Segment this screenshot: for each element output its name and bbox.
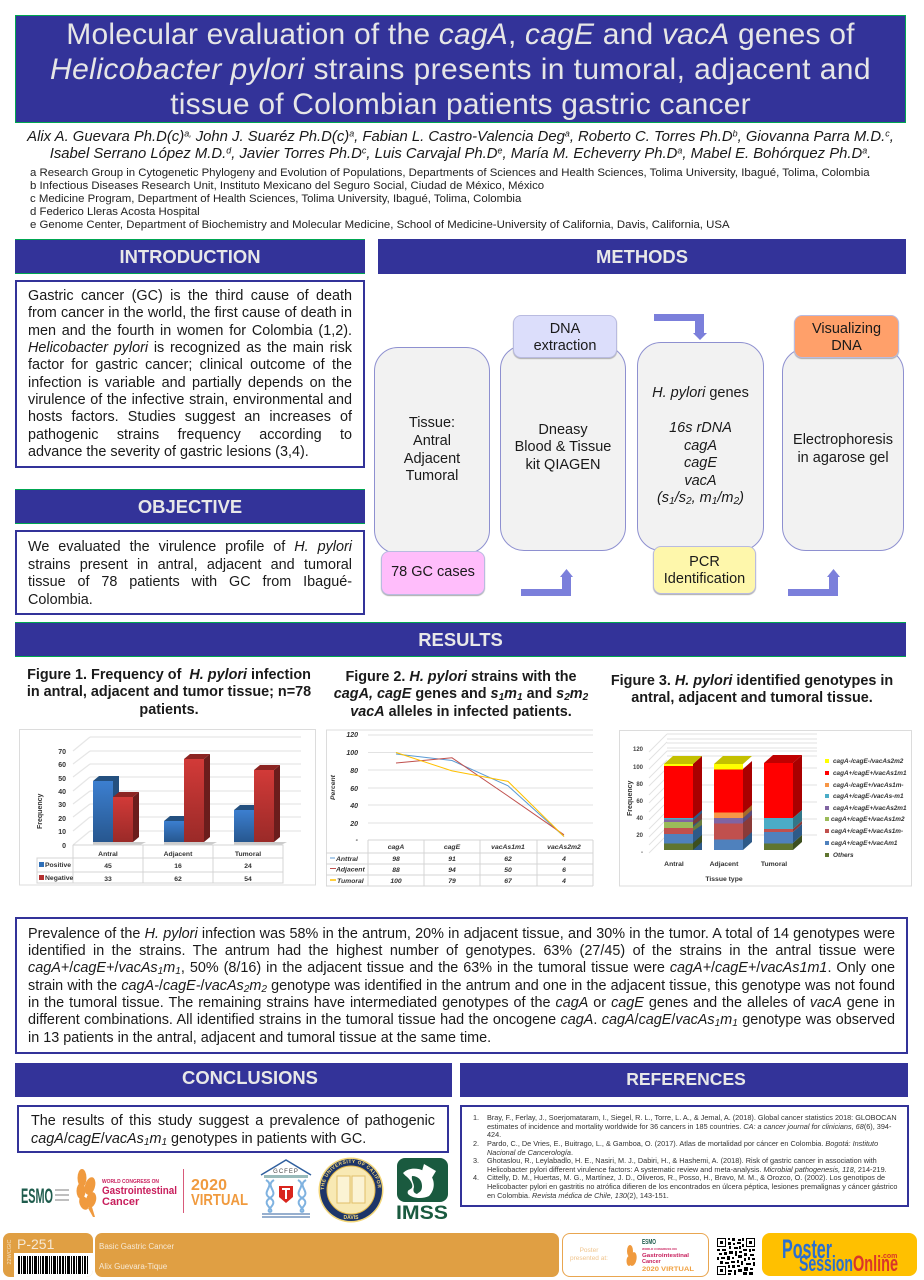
reference 4: en Colombia. Revista médica de Chile, 130(2), 143-151. <box>487 1191 669 1200</box>
affiliations <box>30 167 870 231</box>
logo: University of California Davis seal: DAVIS <box>344 1215 359 1221</box>
title <box>15 15 906 123</box>
method box: tissue: Antral <box>413 433 451 449</box>
legend: cagA+/cagE+/vacAs1m1 <box>833 770 907 777</box>
panel: objective text <box>15 530 365 615</box>
legend: Others <box>833 852 854 859</box>
chart: figure 2 line chart: vacAs1m1 <box>491 844 525 851</box>
chart: figure 1 3D bar chart: 70 <box>58 749 66 756</box>
panel: results text: strain with the cagA-/cagE-/vacAs2m2 genotype was identified in the antrum and one in the adjacent tissue, this genotype was not found <box>28 978 895 995</box>
chart: figure 3 stacked 3D bar chart <box>619 730 912 886</box>
logo: ESMO World Congress on Gastrointestinal Cancer 2020 Virtual: WORLD CONGRESS ON <box>102 1179 159 1185</box>
chart: figure 2 line chart: cagE <box>444 844 461 851</box>
chart: figure 2 line chart: 91 <box>448 856 456 863</box>
chart: figure 1 3D bar chart: 10 <box>58 829 66 836</box>
reference 2: 2. <box>473 1139 479 1148</box>
chart: figure 3 stacked 3D bar chart: 40 <box>636 816 644 822</box>
reference 4 <box>473 1173 898 1200</box>
panel: introduction text: pathogenic strains frequency according to <box>28 427 352 443</box>
method box: kit <box>500 345 626 551</box>
chart: figure 1 3D bar chart: Adjacent <box>164 851 193 858</box>
chart: figure 2 line chart: 67 <box>504 878 513 885</box>
method box: genes: cagE <box>684 455 717 471</box>
footer: poster ID tab <box>3 1233 93 1277</box>
tag: 78 GC cases <box>381 551 485 595</box>
reference 2: Nacional de Cancerología. <box>487 1148 573 1157</box>
chart: figure 1 3D bar chart: 50 <box>58 776 66 783</box>
heading: conclusions <box>15 1063 452 1097</box>
chart: figure 1 3D bar chart: 40 <box>58 789 66 796</box>
legend: cagA+/cagE+/vacAs1m- <box>831 828 903 835</box>
figure 3 title: Figure 3. H. pylori identified genotypes in <box>611 673 893 689</box>
panel: results text: in the tumoral tissue. The remaining strains have intermediated genotypes of the cagA or cagE genes and the alleles of vacA gene in <box>28 995 895 1011</box>
method box: kit: Dneasy <box>538 422 588 438</box>
panel: introduction text: hosts factors. Studies suggest an increases of <box>28 409 352 425</box>
affiliations: e Genome Center, Department of Biochemistry and Molecular Medicine, School of Medicine-University of California, Davis, California, USA <box>30 219 730 231</box>
chart: figure 3 stacked 3D bar chart: Tissue type <box>705 876 743 883</box>
reference 2 <box>473 1139 878 1157</box>
footer: poster presented at box <box>562 1233 709 1277</box>
method box: kit: kit QIAGEN <box>526 457 600 473</box>
reference 3: Helicobacter pylori different virulence factors: A systematic review and meta-analysis. Microbial pathogenesis, 118, 214-219. <box>487 1165 887 1174</box>
chart: figure 2 line chart: 4 <box>561 878 566 885</box>
chart: figure 2 line chart: 60 <box>350 786 358 793</box>
panel: introduction text: Helicobacter pylori is recognized as the main risk <box>28 340 352 356</box>
reference 3: Ghotaslou, R., Leylabadlo, H. E., Nasiri, M. J., Dabiri, H., & Hashemi, A. (2018). Risk of gastric cancer in association with <box>487 1156 877 1165</box>
adjacent line <box>396 758 564 835</box>
panel: objective text: We evaluated the virulence profile of H. pylori <box>28 539 352 555</box>
chart: figure 2 line chart <box>326 730 594 886</box>
title: Molecular evaluation of the cagA, cagE and vacA genes of <box>66 18 855 51</box>
panel: results text: identified in the strains. The antrum had the highest number of genotypes. 63% (27/45) of the strains in the antral tissue were <box>28 943 895 959</box>
legend: cagA+/cagE+/vacAs1m2 <box>831 816 905 823</box>
chart: figure 1 3D bar chart: 0 <box>62 843 66 850</box>
chart: figure 3 stacked 3D bar chart: 60 <box>636 799 644 805</box>
logo: GCFEP <box>260 1159 312 1218</box>
legend: cagA-/cagE+/vacAs1m- <box>833 782 904 789</box>
chart: figure 3 stacked 3D bar chart: 80 <box>636 782 644 788</box>
arrow: electrophoresis step <box>788 569 840 596</box>
heading: introduction <box>15 239 365 274</box>
affiliations: b Infectious Diseases Research Unit, Instituto Mexicano del Seguro Social, Ciudad de México, México <box>30 180 544 192</box>
chart: figure 2 line chart: 6 <box>562 867 566 874</box>
heading: methods <box>378 239 906 274</box>
tumoral stack <box>764 755 802 850</box>
chart: figure 3 stacked 3D bar chart: 100 <box>633 765 644 771</box>
chart: figure 1 3D bar chart <box>19 729 316 886</box>
panel: results text <box>15 917 908 1054</box>
panel: introduction text: virulence of the infective strain, environmental and <box>28 392 352 408</box>
chart: figure 2 line chart: cagA <box>388 844 404 851</box>
chart: figure 2 line chart: 88 <box>392 867 400 874</box>
method box: genes: vacA <box>684 473 717 489</box>
footer: QR code <box>717 1238 755 1275</box>
chart: figure 1 3D bar chart: 30 <box>58 802 66 809</box>
chart: figure 3 stacked 3D bar chart: 120 <box>633 747 644 753</box>
chart: figure 2 line chart: 94 <box>448 867 456 874</box>
legend: cagA-/cagE-/vacAs2m2 <box>833 758 904 765</box>
figure 1 title: patients. <box>139 702 199 718</box>
chart: figure 1 3D bar chart: 45 <box>104 863 112 870</box>
legend: cagA+/cagE+/vacAm1 <box>831 840 898 847</box>
antral bars <box>93 776 139 842</box>
footer: PosterSessionOnline logo: .com <box>881 1253 897 1260</box>
panel: results text: Prevalence of the H. pylori infection was 58% in the antrum, 20% in adjacent tissue, and 30% in the tumor. A total of 14 genotypes were <box>28 926 895 942</box>
legend: cagA+/cagE-/vacAs-m1 <box>833 793 904 800</box>
tag: visualizing DNA: DNA <box>831 338 862 354</box>
chart: figure 2 line chart: 98 <box>392 856 400 863</box>
chart: figure 2 line chart: 79 <box>448 878 456 885</box>
footer: poster presented at box: ESMO <box>642 1239 656 1246</box>
affiliations: a Research Group in Cytogenetic Phylogeny and Evolution of Populations, Departments of Sciences and Health Sciences, Tolima University, Ibagué, Tolima, Colombia <box>30 167 870 179</box>
chart: figure 2 line chart: Tumoral <box>337 878 364 885</box>
chart: figure 3 stacked 3D bar chart: Antral <box>664 861 684 868</box>
panel: introduction text <box>15 280 365 468</box>
chart: figure 2 line chart: 4 <box>561 856 566 863</box>
heading: methods: METHODS <box>596 246 688 267</box>
heading: introduction: INTRODUCTION <box>120 246 260 267</box>
antral line <box>396 754 564 836</box>
reference 1: Bray, F., Ferlay, J., Soerjomataram, I., Siegel, R. L., Torre, L. A., & Jemal, A. (2018). Global cancer statistics 2018: GLOBOCAN <box>487 1113 897 1122</box>
legend: cagA+/cagE+/vacAs2m1 <box>833 805 907 812</box>
figure 2 title: Figure 2. H. pylori strains with the <box>345 669 577 685</box>
title: Helicobacter pylori strains presents in tumoral, adjacent and <box>50 53 871 86</box>
panel: objective text: Colombia. <box>28 592 93 608</box>
logo: University of California Davis seal <box>318 1158 384 1222</box>
footer: poster presented at box: WORLD CONGRESS ON <box>642 1247 677 1251</box>
authors: Alix A. Guevara Ph.D(c)a, John J. Suaréz Ph.D(c)a, Fabian L. Castro-Valencia Dega, Roberto C. Torres Ph.Db, Giovanna Parra M.D.c, <box>27 129 894 145</box>
reference 4: Cittelly, D. M., Huertas, M. G., Martínez, J. D., Oliveros, R., Posso, H., Bravo, M. M., & Orozco, O. (2002). Los genotipos de <box>487 1173 885 1182</box>
method box: tissue: Tumoral <box>406 468 458 484</box>
chart: figure 2 line chart: 40 <box>349 803 358 810</box>
adjacent stack <box>714 756 752 850</box>
affiliations: c Medicine Program, Department of Health Sciences, Tolima University, Ibagué, Tolima, Colombia <box>30 193 521 205</box>
tag: PCR identification <box>653 546 756 594</box>
method box: tissue <box>374 347 490 554</box>
chart: figure 1 3D bar chart: Antral <box>98 851 118 858</box>
panel: references list <box>460 1105 909 1207</box>
reference 3 <box>473 1156 887 1174</box>
tag: PCR identification: PCR <box>689 554 720 570</box>
tag: DNA extraction: DNA <box>550 320 580 336</box>
tag: PCR identification: Identification <box>664 571 745 587</box>
tag: 78 GC cases: 78 GC cases <box>391 564 475 580</box>
adjacent bars <box>164 754 210 842</box>
method box: electrophoresis: in agarose gel <box>797 450 889 466</box>
panel: introduction text: factor for gastric cancer; clinical outcome of the <box>28 357 352 373</box>
method box: genes: 16s rDNA <box>669 420 732 436</box>
arrow: genes step <box>654 314 707 340</box>
method box: genes <box>637 342 764 551</box>
figure 3 title <box>611 673 893 706</box>
method box: genes: H. pylori genes <box>652 385 749 401</box>
chart: figure 1 3D bar chart: 24 <box>244 863 252 870</box>
reference 1: 424. <box>487 1130 501 1139</box>
chart: figure 2 line chart: Anttral <box>335 856 358 863</box>
chart: figure 1 3D bar chart: 33 <box>104 876 112 883</box>
reference 3: 3. <box>473 1156 479 1165</box>
panel: introduction text: from cancer in the world, the first cause of death in <box>28 305 352 321</box>
figure 2 title: cagA, cagE genes and s1m1 and s2m2 <box>334 686 588 703</box>
chart: figure 3 stacked 3D bar chart: Adjacent <box>710 861 739 868</box>
panel: introduction text: men and the fourth in women for Colombia (1,2). <box>28 323 352 339</box>
panel: conclusions text <box>17 1105 449 1153</box>
panel: introduction text: infection is variable and partially depends on the <box>28 375 352 391</box>
chart: figure 1 3D bar chart: Tumoral <box>235 851 261 858</box>
reference 1: estimates of incidence and mortality worldwide for 36 cancers in 185 countries. CA: a cancer journal for clinicians, 68(6), 394- <box>487 1122 891 1131</box>
poster number: P-251 <box>17 1236 54 1252</box>
poster code side label: 22WCGIC <box>7 1239 13 1265</box>
reference 2: Pardo, C., De Vries, E., Buitrago, L., & Gamboa, O. (2017). Atlas de mortalidad por cáncer en Colombia. Bogotá: Instituto <box>487 1139 878 1148</box>
footer: poster presented at box: presented at: <box>570 1255 608 1262</box>
footer: poster presented at box: 2020 VIRTUAL <box>642 1266 694 1273</box>
chart: figure 1 3D bar chart: Frequency <box>37 793 44 829</box>
panel: objective text: strains present in antral, adjacent and tumoral <box>28 557 352 573</box>
heading: results <box>15 622 906 657</box>
method box: tissue: Tissue: <box>409 415 455 431</box>
tag: DNA extraction <box>513 315 617 358</box>
logo: ESMO World Congress on Gastrointestinal Cancer 2020 Virtual <box>21 1169 248 1217</box>
method box: electrophoresis: Electrophoresis <box>793 432 893 448</box>
logo: ESMO World Congress on Gastrointestinal Cancer 2020 Virtual: 2020 <box>191 1177 227 1194</box>
chart: figure 1 3D bar chart: 54 <box>244 876 252 883</box>
chart: figure 2 line chart: 20 <box>349 821 358 828</box>
logo: GCFEP: GCFEP <box>273 1169 299 1175</box>
panel: results text: different combinations. All identified strains in the tumoral tissue had the oncogene cagA. cagA/cagE/vacAs1m1 genotype was observed <box>28 1012 895 1029</box>
heading: results: RESULTS <box>418 629 503 650</box>
chart: figure 2 line chart: 62 <box>504 856 512 863</box>
footer: PosterSessionOnline logo: Session <box>799 1251 853 1276</box>
method box: genes: (s1/s2, m1/m2) <box>657 490 744 508</box>
footer: poster presented at box: Gastrointestinal <box>642 1253 690 1259</box>
reference 4: 4. <box>473 1173 479 1182</box>
figure 1 title: in antral, adjacent and tumor tissue; n=78 <box>27 684 311 700</box>
panel: conclusions text: cagA/cagE/vacAs1m1 genotypes in patients with GC. <box>31 1131 366 1148</box>
authors <box>26 129 894 162</box>
method box: tissue: Adjacent <box>404 450 460 466</box>
chart: figure 3 stacked 3D bar chart: 20 <box>636 833 644 839</box>
logo: ESMO World Congress on Gastrointestinal Cancer 2020 Virtual: Cancer <box>102 1196 140 1208</box>
arrow: kit step <box>521 569 573 596</box>
tumoral bars <box>234 765 280 842</box>
tag: visualizing DNA: Visualizing <box>812 320 881 336</box>
heading: references <box>460 1063 908 1097</box>
tag: DNA extraction: extraction <box>534 338 596 354</box>
heading: objective <box>15 489 365 524</box>
chart: figure 1 3D bar chart: 60 <box>58 762 66 769</box>
reference 4: Helicobacter pylori en gastritis no atrófica difieren de los encontrados en úlcera péptica, lesiones premalignas y cáncer gástrico <box>487 1182 897 1191</box>
chart: figure 1 3D bar chart: 62 <box>174 876 182 883</box>
footer: session bar: Basic Gastric Cancer <box>99 1242 174 1251</box>
logo: IMSS <box>396 1158 448 1219</box>
chart: figure 2 line chart: - <box>356 837 359 844</box>
chart: figure 1 3D bar chart: Negative <box>45 875 74 882</box>
figure 2 title: vacA alleles in infected patients. <box>350 704 572 720</box>
method box: genes: cagA <box>684 438 717 454</box>
method box: electrophoresis <box>782 348 904 551</box>
panel: introduction text: advance the severity of gastric lesions (3,4). <box>28 444 309 460</box>
tag: visualizing DNA <box>794 315 899 358</box>
chart: figure 2 line chart: 100 <box>346 750 358 757</box>
footer: poster presented at box: Poster <box>580 1247 599 1254</box>
figure 3 title: antral, adjacent and tumoral tissue. <box>631 690 873 706</box>
panel: objective text: tissue of 78 patients with GC from Ibagué- <box>28 574 352 590</box>
footer: PosterSessionOnline logo: Poster <box>782 1234 832 1264</box>
chart: figure 2 line chart: vacAs2m2 <box>547 844 581 851</box>
title: tissue of Colombian patients gastric cancer <box>170 88 751 121</box>
reference 1 <box>473 1113 897 1139</box>
panel: conclusions text: The results of this study suggest a prevalence of pathogenic <box>31 1113 435 1129</box>
chart: figure 3 stacked 3D bar chart: Frequency <box>627 780 634 816</box>
logo: ESMO World Congress on Gastrointestinal Cancer 2020 Virtual: Gastrointestinal <box>102 1185 177 1197</box>
chart: figure 2 line chart: 80 <box>350 768 358 775</box>
footer: poster presented at box: Cancer <box>642 1259 662 1265</box>
chart: figure 2 line chart: Percent <box>330 774 337 800</box>
chart: figure 2 line chart: Adjacent <box>335 866 365 874</box>
chart: figure 1 3D bar chart: Positive <box>45 862 71 869</box>
chart: figure 2 line chart: 120 <box>346 732 358 739</box>
figure 1 title <box>27 667 311 718</box>
reference 1: 1. <box>473 1113 479 1122</box>
footer: PosterSessionOnline logo <box>762 1233 917 1276</box>
authors: Isabel Serrano López M.D.d, Javier Torres Ph.Dc, Luis Carvajal Ph.De, María M. Echeverry Ph.Da, Mabel E. Bohórquez Ph.Da. <box>50 146 871 162</box>
footer: session bar: Alix Guevara-Tique <box>99 1262 167 1270</box>
heading: objective: OBJECTIVE <box>138 496 242 517</box>
chart: figure 3 stacked 3D bar chart: Tumoral <box>761 861 787 868</box>
panel: results text: cagA+/cagE+/vacAs1m1, 50% (8/16) in the adjacent tissue and the 63% in the tumoral tissue were cagA+/cagE+/vacAs1m1. Only one <box>28 960 895 977</box>
heading: references: REFERENCES <box>626 1069 746 1089</box>
figure 1 title: Figure 1. Frequency of H. pylori infection <box>27 667 311 683</box>
panel: results text: in 13 patients in the antral, adjacent and tumoral tissue at the same time. <box>28 1030 491 1046</box>
tumoral line <box>396 752 564 836</box>
affiliations: d Federico Lleras Acosta Hospital <box>30 206 200 218</box>
chart: figure 1 3D bar chart: 16 <box>174 863 182 870</box>
logo: ESMO World Congress on Gastrointestinal Cancer 2020 Virtual: ESMO <box>21 1185 53 1208</box>
chart: figure 1 3D bar chart: 20 <box>58 816 66 823</box>
panel: introduction text: Gastric cancer (GC) is the third cause of death <box>28 288 352 304</box>
legend <box>825 758 907 859</box>
figure 2 title <box>334 669 588 720</box>
chart: figure 2 line chart: 50 <box>504 867 512 874</box>
footer: session bar <box>95 1233 559 1277</box>
chart: figure 3 stacked 3D bar chart: - <box>641 850 643 856</box>
barcode <box>14 1253 93 1277</box>
method box: kit: Blood & Tissue <box>515 439 611 455</box>
heading: conclusions: CONCLUSIONS <box>182 1067 318 1088</box>
antral stack <box>664 756 702 850</box>
chart: figure 2 line chart: 100 <box>390 878 402 885</box>
